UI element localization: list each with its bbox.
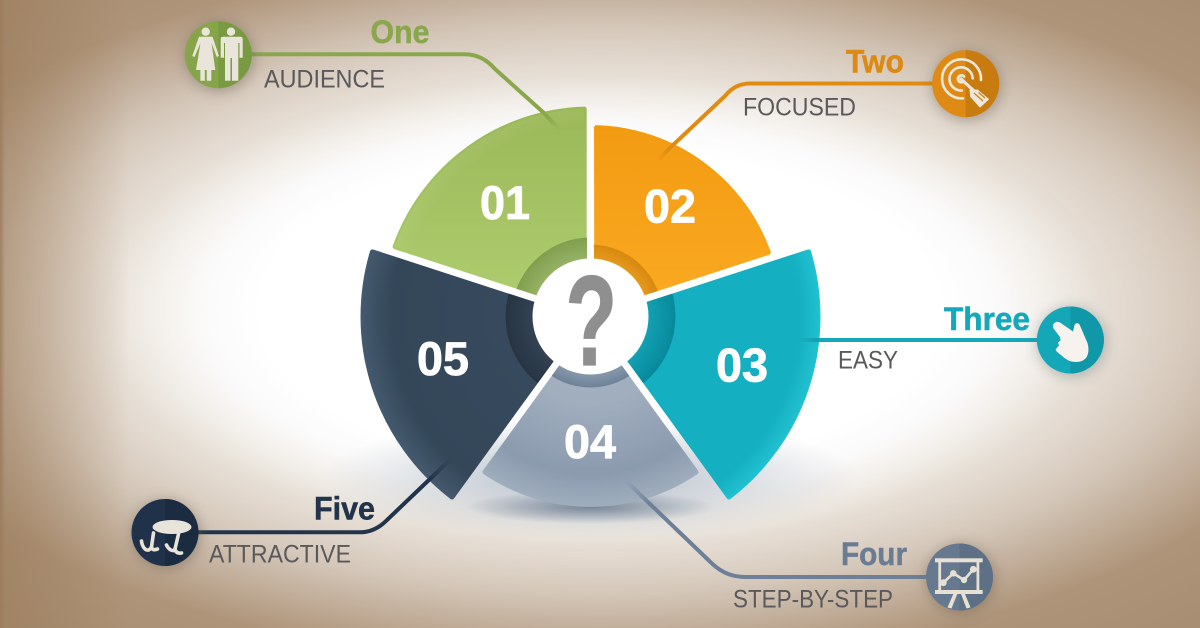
icon: step-by-step presentation board — [926, 544, 994, 613]
connector: one — [250, 54, 560, 130]
segment 03 — [627, 249, 820, 500]
number 01: 01 — [480, 176, 530, 229]
segment 02 — [594, 125, 771, 296]
segment 04 — [482, 365, 698, 507]
heading: Four: Four — [841, 536, 907, 572]
icon: pointing hand — [1037, 306, 1106, 376]
connector: five — [197, 457, 453, 532]
connector: two — [658, 84, 934, 160]
centre circle with question mark: ? — [566, 249, 617, 392]
icon: target — [932, 50, 1001, 120]
label: easy: EASY — [838, 346, 898, 374]
number 02: 02 — [644, 180, 696, 232]
segment 01 — [392, 106, 587, 296]
heading: Three: Three — [944, 301, 1030, 337]
label: step-by-step: STEP-BY-STEP — [733, 586, 893, 614]
heading: Two: Two — [846, 44, 904, 80]
heading: One: One — [370, 14, 430, 50]
connector: three — [797, 338, 1038, 342]
segment 05 — [360, 249, 554, 500]
label: focused: FOCUSED — [743, 94, 856, 122]
number 04: 04 — [564, 415, 616, 468]
label: attractive: ATTRACTIVE — [209, 540, 351, 568]
icon: audience people — [185, 21, 254, 91]
heading: Five: Five — [314, 490, 375, 526]
number 03: 03 — [716, 338, 768, 392]
centre circle with question mark — [532, 249, 648, 392]
number 05: 05 — [417, 332, 469, 385]
icon: table with hooks — [132, 499, 200, 568]
pie shadow — [320, 416, 860, 540]
connector: four — [625, 480, 928, 577]
label: audience: AUDIENCE — [264, 66, 385, 94]
